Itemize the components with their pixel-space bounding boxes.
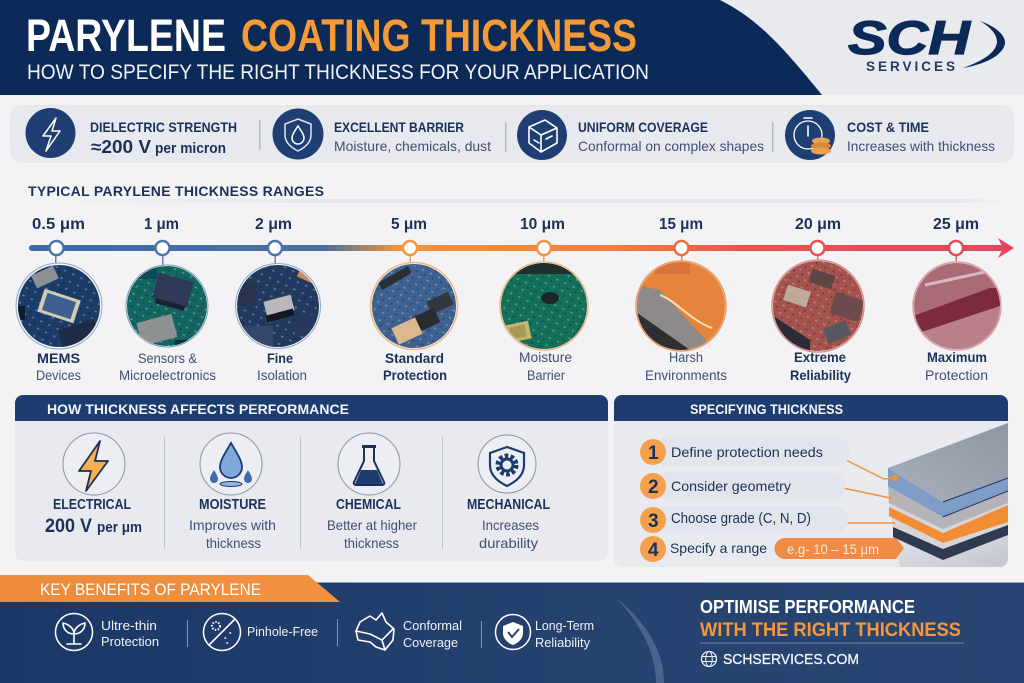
label: MEMS devices: Devices (36, 368, 81, 383)
thickness marker 15 um: 15 μm (659, 216, 703, 233)
feature: cost and time: Increases with thickness (847, 138, 995, 154)
feature: dielectric strength: per micron (155, 141, 226, 157)
feature: uniform coverage: Conformal on complex shapes (578, 138, 764, 154)
benefit: ultra-thin protection: Ultre-thin (101, 618, 157, 633)
column: moisture: MOISTURE (199, 497, 266, 513)
call to action: OPTIMISE PERFORMANCE (700, 597, 915, 617)
feature: dielectric strength: ≈200 V (91, 137, 151, 157)
timeline arrow (29, 238, 1014, 258)
thickness marker 1 um: 1 μm (144, 216, 179, 233)
thickness marker 2 um (255, 216, 292, 266)
step 2: 2 (648, 477, 659, 498)
photo: extreme reliability board (772, 260, 865, 352)
thickness marker 10 um (520, 216, 565, 266)
feature: cost and time: COST & TIME (847, 119, 929, 135)
label: standard protection: Standard (385, 350, 444, 366)
feature: excellent barrier: EXCELLENT BARRIER (334, 119, 464, 135)
label: sensors and microelectronics: Microelectronics (119, 368, 216, 383)
label: harsh environments (645, 350, 727, 383)
label: sensors and microelectronics (119, 351, 216, 383)
step 1: 1 (648, 443, 659, 464)
thickness marker 2 um: 2 μm (255, 216, 292, 233)
column: chemical (327, 433, 417, 551)
panel: how thickness affects performance (15, 395, 608, 561)
banner: key benefits: KEY BENEFITS OF PARYLENE (40, 580, 261, 599)
photo: fine isolation board (235, 263, 321, 349)
label: sensors and microelectronics: Sensors & (138, 351, 197, 366)
thickness marker 1 um (144, 216, 179, 266)
photo: maximum protection block (913, 262, 1003, 352)
thickness marker 5 um (391, 216, 427, 266)
logo: SCH Services: SCH (848, 11, 971, 64)
benefit: ultra-thin protection: Protection (101, 634, 159, 649)
thickness marker 20 um (795, 216, 841, 266)
benefit: ultra-thin protection (56, 614, 159, 650)
call to action (700, 597, 964, 668)
column: electrical: per μm (97, 520, 142, 536)
call to action: WITH THE RIGHT THICKNESS (700, 620, 961, 641)
label: maximum protection (925, 349, 988, 383)
label: maximum protection: Maximum (927, 349, 987, 365)
thickness marker 20 um: 20 μm (795, 216, 841, 233)
benefit: long-term reliability (496, 614, 594, 650)
feature: excellent barrier: Moisture, chemicals, dust (334, 138, 491, 154)
section heading: thickness ranges: TYPICAL PARYLENE THICKNESS RANGES (28, 183, 324, 199)
header banner (0, 0, 1024, 95)
feature: excellent barrier (272, 108, 491, 160)
icon: globe (702, 652, 716, 666)
step 3: Choose grade (C, N, D) (671, 511, 811, 527)
label: MEMS devices (36, 350, 81, 383)
logo: SCH Services: SERVICES (866, 59, 955, 74)
subtitle: HOW TO SPECIFY THE RIGHT THICKNESS FOR YOUR APPLICATION (27, 61, 649, 84)
panel: specifying thickness: SPECIFYING THICKNESS (690, 401, 843, 417)
column: moisture (189, 433, 276, 551)
feature: uniform coverage: UNIFORM COVERAGE (578, 119, 708, 135)
label: moisture barrier: Moisture (519, 350, 572, 365)
title accent: COATING THICKNESS (241, 10, 637, 61)
thickness marker 25 um: 25 μm (933, 216, 979, 233)
step 2: Consider geometry (671, 478, 791, 494)
label: harsh environments: Environments (645, 368, 727, 383)
label: extreme reliability: Extreme (794, 349, 846, 365)
step 4: 4 (648, 540, 659, 561)
label: harsh environments: Harsh (669, 350, 703, 365)
feature: dielectric strength (26, 108, 237, 158)
title: PARYLENE (26, 10, 226, 61)
label: MEMS devices: MEMS (37, 350, 80, 366)
photo: sensors (125, 264, 209, 350)
feature: cost and time (785, 110, 995, 160)
column: moisture: thickness (206, 535, 261, 551)
benefit: pinhole-free: Pinhole-Free (247, 624, 318, 639)
footer band (0, 575, 1024, 683)
layered coating stack (888, 423, 1008, 567)
thickness marker 0.5 um: 0.5 μm (32, 216, 85, 233)
thickness marker 25 um (933, 216, 979, 266)
column: mechanical: MECHANICAL (467, 497, 550, 513)
label: standard protection: Protection (383, 367, 447, 383)
step 4 (640, 536, 904, 562)
benefit: conformal coverage: Conformal (403, 618, 462, 633)
column: electrical: 200 V (45, 516, 92, 537)
banner: key benefits (0, 575, 340, 602)
step 3: 3 (648, 511, 659, 532)
benefit: pinhole-free (204, 614, 318, 650)
call to action: SCHSERVICES.COM (723, 651, 859, 668)
label: extreme reliability: Reliability (790, 367, 851, 383)
logo: SCH Services (848, 11, 1005, 74)
column: mechanical (467, 435, 550, 551)
step 4: Specify a range (670, 540, 767, 556)
benefit: long-term reliability: Reliability (535, 635, 590, 650)
connector lines (843, 460, 898, 523)
column: mechanical: durability (479, 535, 538, 551)
thickness marker 0.5 um (32, 216, 85, 266)
label: standard protection (383, 350, 447, 383)
photo: moisture barrier board (500, 262, 588, 350)
label: fine isolation (257, 350, 307, 383)
feature strip (10, 105, 1014, 163)
photo: MEMS chip (15, 262, 105, 353)
column: chemical: Better at higher (327, 517, 417, 533)
step 2 (640, 472, 845, 500)
label: moisture barrier (519, 350, 572, 383)
label: extreme reliability (790, 349, 851, 383)
column: chemical: CHEMICAL (336, 497, 401, 513)
column: electrical (45, 433, 142, 537)
feature: dielectric strength: DIELECTRIC STRENGTH (90, 119, 237, 135)
step 4: e.g- 10 – 15 μm (787, 542, 879, 557)
step 1: Define protection needs (671, 444, 823, 460)
benefit: long-term reliability: Long-Term (535, 618, 594, 633)
feature: uniform coverage (517, 110, 764, 160)
column: mechanical: Increases (482, 517, 539, 533)
panel: specifying thickness (614, 395, 1008, 567)
photo: harsh environments coating (636, 260, 726, 352)
thickness marker 15 um (659, 216, 703, 266)
column: electrical: ELECTRICAL (53, 497, 131, 513)
thickness marker 5 um: 5 μm (391, 216, 427, 233)
label: fine isolation: Fine (267, 350, 293, 366)
benefit: conformal coverage: Coverage (403, 635, 458, 650)
column: chemical: thickness (344, 535, 399, 551)
step 3 (640, 506, 848, 533)
label: fine isolation: Isolation (257, 368, 307, 383)
photo: standard protection board (370, 262, 458, 351)
label: moisture barrier: Barrier (527, 368, 565, 383)
panel: how thickness affects performance: HOW THICKNESS AFFECTS PERFORMANCE (47, 401, 349, 417)
step 1 (640, 437, 850, 466)
label: maximum protection: Protection (925, 368, 988, 383)
benefit: conformal coverage (356, 613, 462, 650)
column: moisture: Improves with (189, 517, 276, 533)
thickness marker 10 um: 10 μm (520, 216, 565, 233)
